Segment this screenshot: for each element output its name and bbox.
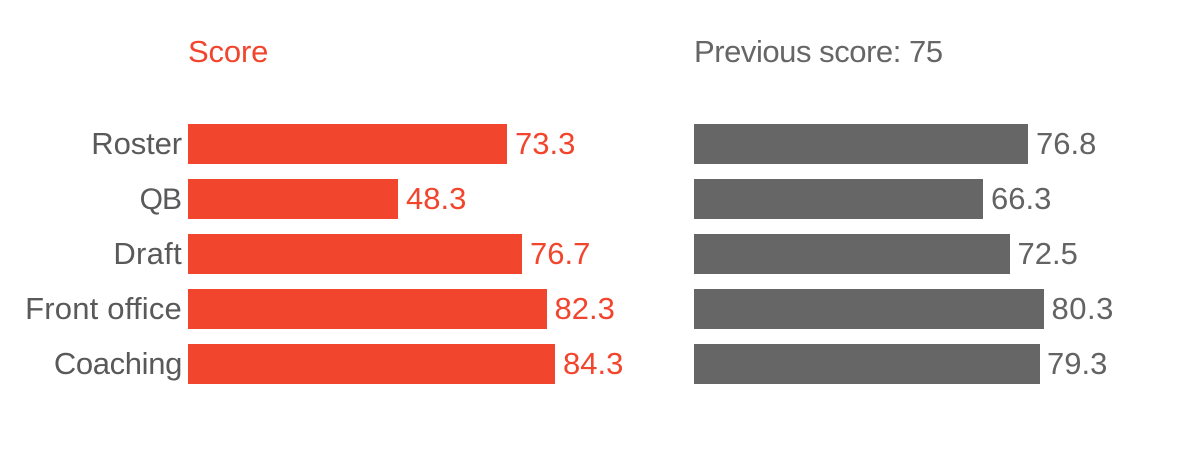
heading: Previous score: Previous score: 75 (694, 34, 943, 69)
bar: Draft 72.5 (694, 234, 1010, 274)
bar: Draft 76.7 (188, 234, 522, 274)
bar: Roster 76.8 (694, 124, 1028, 164)
bar chart: Score (188, 124, 623, 384)
value: 73.3: 73.3 (515, 126, 575, 161)
bar chart: Previous score (694, 124, 1114, 384)
value: 48.3: 48.3 (406, 181, 466, 216)
bar: Front office 80.3 (694, 289, 1044, 329)
bar: Front office 82.3 (188, 289, 546, 329)
value: 82.3: 82.3 (554, 291, 615, 326)
value: 80.3: 80.3 (1052, 291, 1114, 326)
row label: QB: QB (140, 183, 181, 216)
value: 72.5: 72.5 (1018, 236, 1078, 271)
value: 76.8: 76.8 (1036, 126, 1096, 161)
row label: Coaching: Coaching (54, 346, 182, 381)
row label: Roster: Roster (91, 126, 182, 161)
row label: Draft: Draft (113, 236, 182, 271)
row label: Front office: Front office (25, 291, 182, 326)
value: 66.3: 66.3 (991, 181, 1051, 216)
heading: Score: Score (188, 34, 268, 69)
value: 79.3: 79.3 (1047, 346, 1107, 381)
bar: Coaching 84.3 (188, 344, 555, 384)
bar: QB 66.3 (694, 179, 983, 219)
bar: QB 48.3 (188, 179, 398, 219)
bar: Coaching 79.3 (694, 344, 1040, 384)
value: 84.3: 84.3 (563, 346, 623, 381)
bar: Roster 73.3 (188, 124, 507, 164)
value: 76.7: 76.7 (530, 236, 590, 271)
